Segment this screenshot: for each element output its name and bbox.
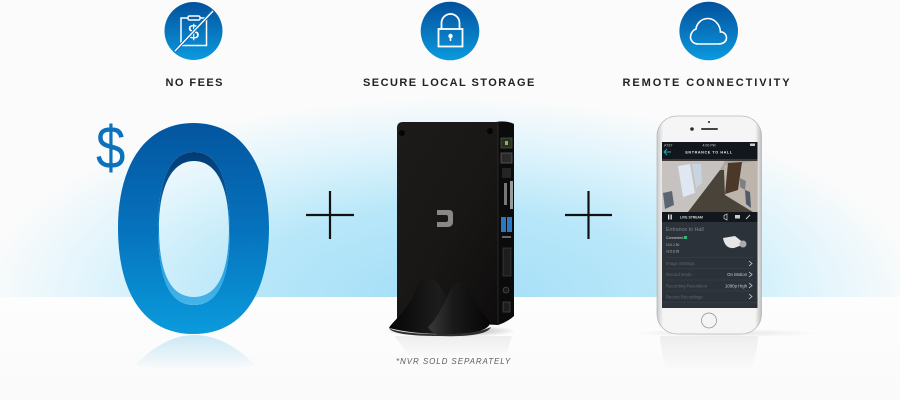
device stand <box>389 277 491 336</box>
camera settings list: On Motion <box>727 272 748 277</box>
icon: no fees <box>164 2 222 60</box>
caption: NVR sold separately: *NVR SOLD SEPARATELY <box>396 357 511 366</box>
icon: cloud <box>679 2 738 60</box>
phone reflection <box>660 336 758 372</box>
big zero numeral <box>118 123 269 334</box>
heading: remote connectivity: REMOTE CONNECTIVITY <box>622 77 792 89</box>
NVR device <box>384 121 516 337</box>
camera video feed <box>662 159 758 212</box>
phone home button <box>702 313 716 328</box>
phone screen: ENTRANCE TO HALL <box>685 150 733 154</box>
icon: padlock <box>421 2 479 60</box>
icon: no fees: $ <box>188 22 199 44</box>
video controls bar <box>662 212 758 222</box>
camera details: Connected <box>666 236 683 240</box>
device logo <box>437 210 453 227</box>
phone screen: AT&T <box>664 144 674 148</box>
device side ports <box>501 138 513 312</box>
plus sign <box>306 191 354 239</box>
floor <box>0 297 900 400</box>
video controls bar: LIVE STREAM <box>680 216 703 220</box>
camera details: 10.0.2.50 <box>666 243 680 247</box>
NVR reflection <box>395 336 512 358</box>
phone screen <box>662 142 758 308</box>
dollar sign: $ <box>96 114 125 181</box>
phone screen: 4:00 PM <box>702 144 716 148</box>
camera details <box>666 227 746 254</box>
camera settings list: Record Mode <box>666 272 692 277</box>
plus sign <box>565 191 612 239</box>
camera details: Entrance to Hall <box>666 227 704 233</box>
smartphone <box>657 116 762 334</box>
phone speaker and camera <box>690 121 718 131</box>
camera settings list: Recent Recordings <box>666 294 703 300</box>
heading: secure local storage: SECURE LOCAL STORAGE <box>363 77 536 89</box>
blue horizon glow <box>0 97 900 297</box>
camera settings list <box>662 258 757 302</box>
camera settings list: Image Settings <box>666 261 695 266</box>
camera settings list: 1080p High <box>725 284 748 288</box>
phone shadow <box>630 329 820 337</box>
zero reflection <box>135 335 255 370</box>
heading: no fees: NO FEES <box>166 77 224 89</box>
camera details: v3.5.8.28 <box>666 250 679 254</box>
camera settings list: Recording Resolution <box>666 284 708 288</box>
